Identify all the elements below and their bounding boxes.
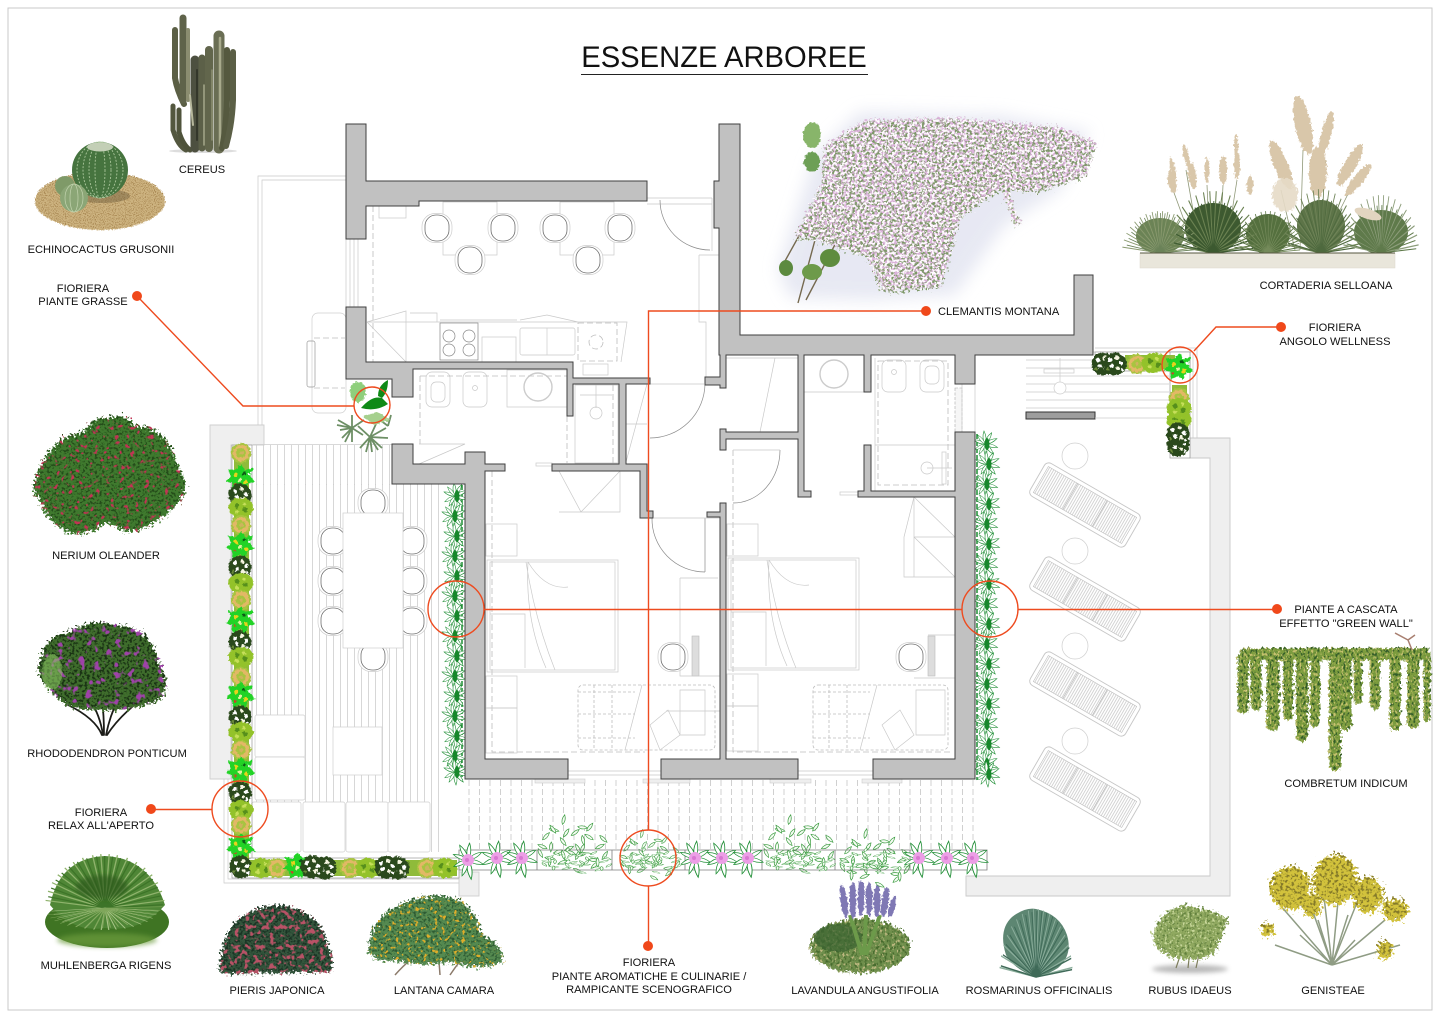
dashed paving: [465, 780, 975, 850]
plumes: [1166, 94, 1374, 212]
flowering mass: [795, 118, 1096, 292]
plant: cortaderia selloana in planter: [1122, 94, 1419, 268]
label: NERIUM OLEANDER: [52, 550, 160, 562]
plant: pieris japonica: [219, 905, 333, 974]
plant: lavandula angustifolia: [810, 880, 910, 973]
plant labels: [27, 164, 1408, 997]
grass mounds: [1122, 189, 1419, 256]
plant: clematis montana climbing wall: [778, 112, 1096, 303]
plant: muhlenbergia rigens: [45, 852, 169, 948]
label: COMBRETUM INDICUM: [1284, 778, 1408, 790]
label: CEREUS: [179, 164, 225, 176]
label: LAVANDULA ANGUSTIFOLIA: [791, 985, 939, 997]
label: MUHLENBERGA RIGENS: [41, 960, 171, 972]
label: RUBUS IDAEUS: [1148, 985, 1232, 997]
callout: green wall: EFFETTO "GREEN WALL": [1279, 618, 1413, 630]
terrace outlines and grey parapets: [210, 176, 1230, 896]
callout: relax all'aperto: [48, 781, 268, 837]
callout: clemantis montana: CLEMANTIS MONTANA: [938, 306, 1060, 318]
planter: relax all'aperto, left column: [226, 443, 459, 880]
plant: lantana camara: [368, 896, 502, 975]
label: RHODODENDRON PONTICUM: [27, 748, 187, 760]
title: ESSENZE ARBOREE: [581, 42, 867, 74]
label: GENISTEAE: [1301, 985, 1365, 997]
callout: green wall: PIANTE A CASCATA: [1294, 604, 1398, 616]
label: CORTADERIA SELLOANA: [1260, 280, 1393, 292]
planter: aromatiche e rampicante: [453, 814, 988, 889]
plant: echinocactus grusonii: [35, 142, 165, 230]
label: ECHINOCACTUS GRUSONII: [28, 244, 174, 256]
outdoor grill: [307, 313, 346, 413]
callout: fioriera piante grasse: FIORIERA: [57, 283, 110, 295]
plant: rosmarinus officinalis: [1000, 909, 1075, 979]
callout: angolo wellness: ANGOLO WELLNESS: [1280, 336, 1390, 348]
callout: fioriera piante grasse: PIANTE GRASSE: [38, 296, 128, 308]
plant: rhododendron ponticum: [38, 623, 166, 735]
structural walls: [346, 124, 1093, 779]
plume stalks: [1173, 150, 1350, 250]
plant: cereus cactus: [169, 18, 237, 153]
outdoor dining table with chairs: [318, 488, 427, 672]
green wall plants left: [442, 483, 468, 785]
sun loungers and side tables: [1028, 443, 1142, 833]
bedroom left furniture: [486, 463, 720, 753]
callout: fioriera piante grasse: [38, 283, 390, 423]
callout: angolo wellness: FIORIERA: [1309, 322, 1362, 334]
bedroom right furniture: [727, 450, 955, 752]
wall shadow: [778, 112, 1090, 300]
callout: fioriera aromatiche: FIORIERA: [623, 957, 676, 969]
callout: fioriera aromatiche: [552, 830, 747, 996]
outdoor lounge sofa: [252, 715, 430, 852]
callout: fioriera aromatiche: RAMPICANTE SCENOGRAFICO: [566, 984, 732, 996]
plant: nerium oleander: [33, 416, 185, 534]
planter: angolo wellness: [1092, 352, 1193, 458]
wellness deck and shower: [1026, 356, 1169, 419]
planter: piante grasse palm cluster: [337, 380, 391, 452]
small plume: [1353, 205, 1383, 223]
callout: fioriera aromatiche: PIANTE AROMATICHE E CULINARIE /: [552, 971, 747, 983]
plant: combretum indicum hanging: [1243, 633, 1427, 765]
kitchen and dining furniture: [367, 198, 719, 378]
plant: genisteae: [1262, 855, 1408, 965]
callout: relax all'aperto: FIORIERA: [75, 807, 128, 819]
bathroom fixtures right: [726, 355, 975, 491]
wooden deck: [253, 444, 443, 852]
stems and leaves: [779, 122, 840, 303]
callout: relax all'aperto: RELAX ALL'APERTO: [48, 820, 154, 832]
floor plan: [210, 124, 1230, 896]
callout: angolo wellness: [1162, 322, 1390, 383]
plant: rubus idaeus: [1152, 905, 1228, 973]
label: LANTANA CAMARA: [394, 985, 495, 997]
planter box: [1140, 253, 1395, 268]
window sills: [535, 771, 902, 783]
callout: clemantis montana: [648, 306, 1060, 830]
callout: green wall: [428, 581, 1413, 637]
green wall plants right: [974, 431, 1000, 787]
label: ROSMARINUS OFFICINALIS: [966, 985, 1112, 997]
bathroom fixtures left: [419, 370, 705, 464]
label: PIERIS JAPONICA: [230, 985, 325, 997]
